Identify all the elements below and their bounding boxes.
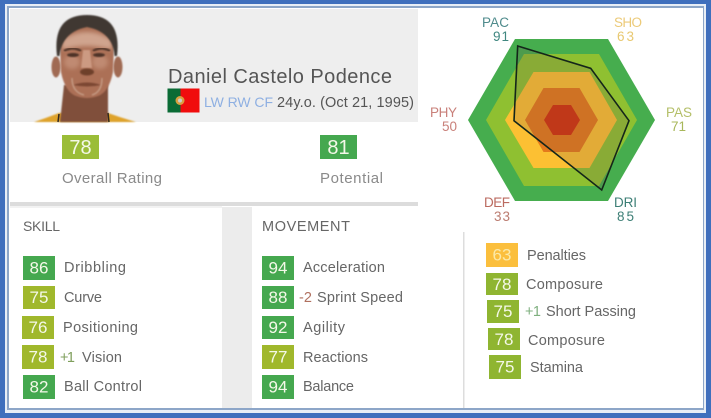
row: Acceleration: Acceleration	[303, 260, 385, 276]
row: Agility: Agility	[303, 320, 346, 336]
row: Sprint Speed: Sprint Speed	[317, 290, 403, 306]
row: Sprint Speed	[262, 286, 403, 309]
label: SHO 63	[614, 15, 642, 44]
label: PAS 71: PAS	[666, 105, 692, 120]
row: Reactions: 77	[269, 348, 287, 366]
player name: Daniel Castelo Podence	[168, 66, 392, 88]
row: Short Passing: Short Passing	[546, 304, 636, 320]
row: Vision: +1	[60, 350, 75, 366]
label: PHY 50: PHY	[430, 105, 457, 120]
label: DEF 33: DEF	[484, 195, 510, 210]
label: DRI 85: 85	[617, 209, 634, 224]
label: DEF 33	[484, 195, 510, 224]
row: Stamina: 75	[496, 358, 514, 376]
heading: skill: SKILL	[23, 218, 60, 234]
row: Composure second	[488, 328, 605, 350]
label: PAS 71: 71	[671, 119, 686, 134]
row: Ball Control: 82	[30, 378, 48, 396]
panel: player header	[10, 9, 418, 122]
label: DRI 85: DRI	[614, 195, 637, 210]
row: Ball Control: Ball Control	[64, 379, 142, 395]
row: Vision: 78	[29, 348, 47, 366]
row: Penalties	[486, 243, 586, 267]
row: Balance: Balance	[303, 379, 354, 395]
row: Composure second: 78	[495, 330, 513, 349]
label: PAC 91: 91	[493, 29, 509, 44]
row: Dribbling: Dribbling	[64, 260, 126, 276]
row: Curve: Curve	[64, 290, 102, 306]
row: Acceleration	[262, 256, 385, 280]
row: Composure: 78	[493, 275, 511, 294]
player portrait	[34, 15, 136, 122]
row: Curve: 75	[30, 288, 48, 307]
player positions: LW RW CF	[204, 94, 273, 110]
player stat polygon	[514, 46, 629, 190]
row: Curve	[23, 286, 102, 309]
heading: movement: MOVEMENT	[262, 219, 350, 235]
label: DRI 85	[614, 195, 637, 224]
row: Positioning: 76	[29, 318, 47, 337]
row: Composure	[486, 273, 603, 295]
flag: Portugal	[168, 88, 200, 112]
row: Vision	[22, 345, 122, 369]
row: Dribbling	[23, 256, 126, 280]
row: Agility: 92	[269, 318, 287, 337]
overall rating	[62, 135, 162, 187]
potential: Potential	[320, 170, 383, 187]
row: Acceleration: 94	[269, 258, 287, 278]
row: Reactions: Reactions	[303, 350, 368, 366]
overall rating: 78	[69, 137, 92, 159]
row: Reactions	[262, 345, 368, 369]
radar chart	[430, 15, 692, 224]
label: PAC 91	[482, 15, 509, 44]
radar hexagon rings	[468, 39, 655, 201]
row: Balance	[262, 375, 354, 399]
label: DEF 33: 33	[494, 209, 510, 224]
label: PAC 91: PAC	[482, 15, 509, 30]
row: Composure second: Composure	[528, 333, 605, 349]
row: Short Passing	[487, 300, 636, 323]
row: Composure: Composure	[526, 277, 603, 293]
panel: movement	[262, 219, 403, 399]
label: PHY 50: 50	[442, 119, 457, 134]
row: Positioning: Positioning	[63, 320, 138, 336]
row: Short Passing: +1	[525, 304, 541, 320]
panel: other stats	[486, 243, 636, 379]
label: PAS 71	[666, 105, 692, 134]
panel: skill	[22, 218, 142, 399]
age and birth date: 24y.o. (Oct 21, 1995)	[277, 95, 414, 111]
row: Stamina: Stamina	[530, 360, 584, 376]
row: Penalties: Penalties	[527, 248, 586, 264]
row: Sprint Speed: -2	[299, 290, 312, 306]
row: Positioning	[22, 316, 138, 339]
label: SHO 63: 63	[617, 29, 634, 44]
potential	[320, 135, 383, 187]
row: Short Passing: 75	[494, 302, 512, 321]
label: SHO 63: SHO	[614, 15, 642, 30]
row: Agility	[262, 316, 346, 339]
row: Dribbling: 86	[30, 258, 48, 278]
row: Sprint Speed: 88	[269, 288, 287, 307]
row: Penalties: 63	[493, 246, 511, 264]
overall rating: Overall Rating	[62, 170, 162, 187]
row: Ball Control	[23, 375, 142, 399]
label: PHY 50	[430, 105, 457, 134]
row: Stamina	[489, 355, 584, 379]
row: Vision: Vision	[82, 350, 122, 366]
potential: 81	[327, 137, 350, 159]
row: Balance: 94	[269, 378, 287, 396]
